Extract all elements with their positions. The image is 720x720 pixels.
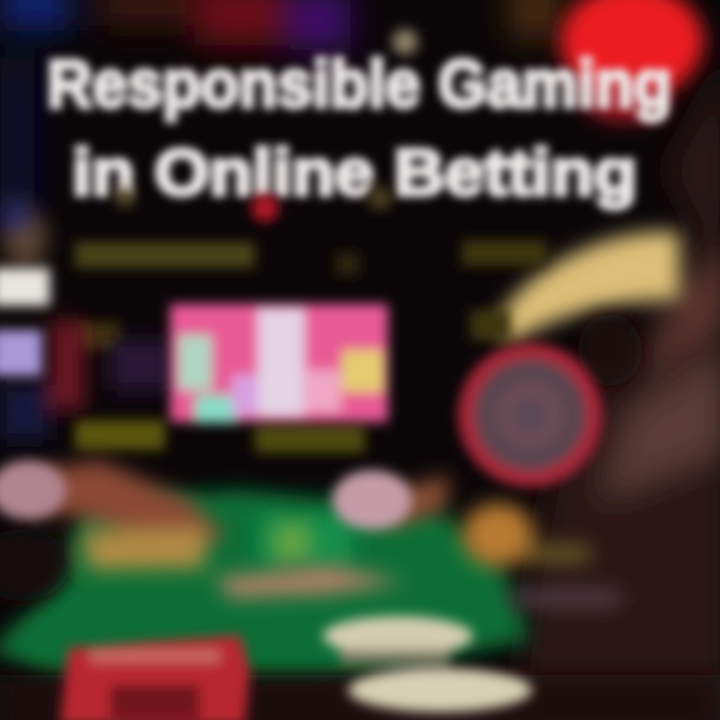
left side machines bbox=[0, 200, 170, 440]
red chips bottom left bbox=[60, 635, 250, 720]
yellow chip under fingers bbox=[495, 231, 680, 345]
green table bbox=[0, 490, 530, 680]
orange chip stack right bbox=[462, 503, 620, 606]
title dots bbox=[115, 29, 418, 222]
right side brown hand and arm bbox=[510, 50, 720, 720]
red top right light bbox=[560, 0, 704, 122]
cards held in hands bbox=[0, 460, 412, 530]
roulette chip bbox=[458, 343, 602, 487]
central pink slot screen bbox=[170, 304, 388, 423]
dark area at table bottom bbox=[0, 675, 720, 720]
title: Responsible Gaming bbox=[47, 46, 672, 122]
title bbox=[47, 46, 672, 209]
hands on the table bbox=[0, 460, 450, 601]
subtitle blurred labels bbox=[75, 240, 547, 453]
dark spot near hand bbox=[578, 314, 642, 386]
cream chip stack bottom center bbox=[323, 616, 532, 712]
left white and purple panels bbox=[0, 268, 50, 376]
top colored lights bbox=[0, 0, 560, 210]
title: in Online Betting bbox=[72, 135, 637, 209]
